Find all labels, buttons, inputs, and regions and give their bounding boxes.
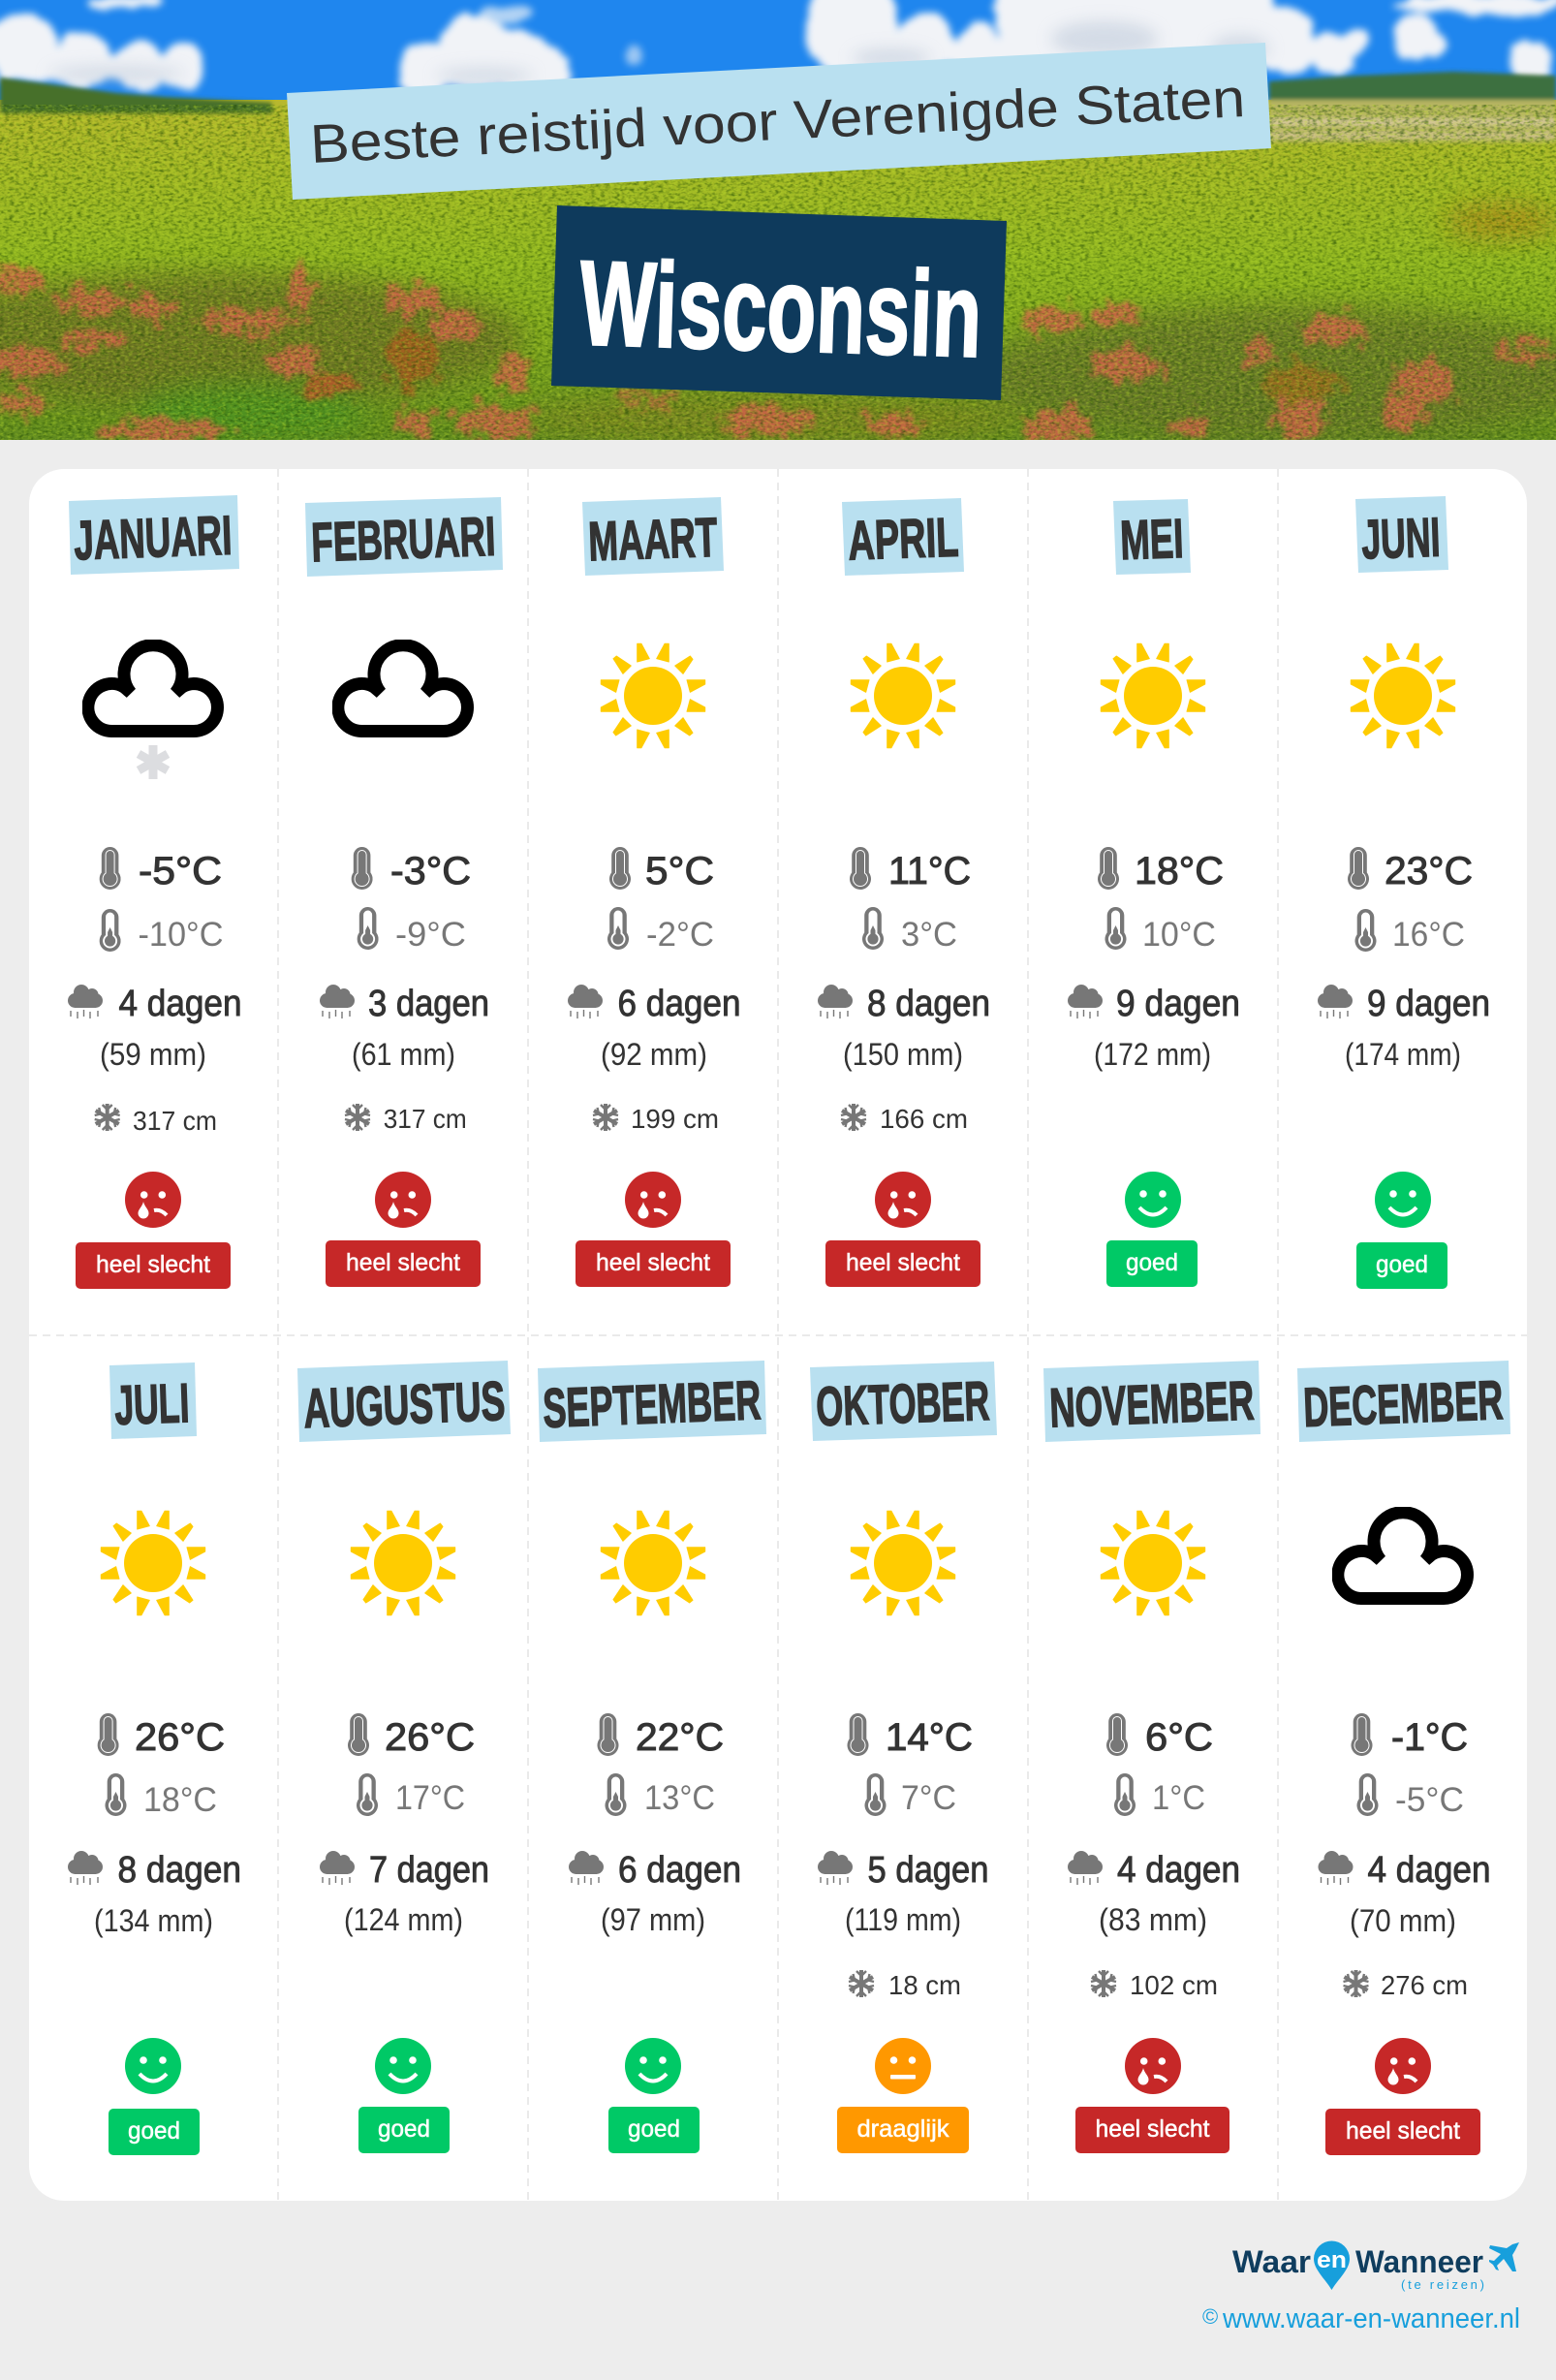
month label <box>582 497 724 576</box>
rating face <box>375 2038 431 2094</box>
high temperature <box>847 1713 973 1759</box>
rating badge: goed <box>1376 1251 1428 1278</box>
rain days: 3 dagen <box>368 984 489 1024</box>
month label <box>109 1362 197 1439</box>
month label <box>1043 1361 1260 1442</box>
month: maart <box>568 497 740 1287</box>
precipitation: (124 mm) <box>344 1902 463 1937</box>
month label <box>305 497 503 577</box>
copyright url: www.waar-en-wanneer.nl <box>1222 2303 1520 2334</box>
rain days <box>320 984 489 1024</box>
rain days: 8 dagen <box>118 1850 241 1891</box>
rain days: 7 dagen <box>369 1850 489 1891</box>
snowfall <box>841 1104 968 1134</box>
rating badge: heel slecht <box>346 1249 460 1276</box>
low temperature <box>864 1773 956 1817</box>
low temperature: -9°C <box>395 916 466 954</box>
low temperature <box>358 907 466 954</box>
high temperature <box>609 847 714 892</box>
month label: JANUARI <box>73 505 233 572</box>
rating badge <box>825 1240 980 1287</box>
month label: NOVEMBER <box>1048 1369 1255 1440</box>
month label: OKTOBER <box>815 1370 990 1438</box>
low temperature <box>862 907 957 954</box>
low temperature <box>1356 1773 1464 1819</box>
rating badge <box>1075 2107 1229 2153</box>
high temperature <box>1348 847 1473 892</box>
high temperature: 18°C <box>1135 850 1224 892</box>
month label <box>538 1361 766 1442</box>
month label: AUGUSTUS <box>302 1370 506 1440</box>
rating face <box>625 1172 681 1228</box>
rating face <box>875 2038 931 2094</box>
rain days <box>320 1850 489 1891</box>
month label <box>1355 496 1448 573</box>
high temperature: -1°C <box>1391 1716 1468 1759</box>
rain days <box>818 1850 988 1891</box>
month label: SEPTEMBER <box>542 1369 762 1440</box>
month label <box>1113 499 1191 575</box>
rating face <box>1125 1172 1181 1228</box>
month label <box>810 1362 997 1441</box>
low temperature <box>605 1773 715 1817</box>
high temperature: 5°C <box>645 850 714 892</box>
snowfall <box>95 1104 217 1136</box>
month: juli <box>68 1362 241 2155</box>
low temperature: 3°C <box>901 916 957 954</box>
high temperature <box>1351 1713 1468 1759</box>
high temperature <box>1106 1713 1213 1759</box>
icon: sun <box>101 1511 205 1615</box>
rating badge: goed <box>628 2115 680 2143</box>
high temperature: 14°C <box>886 1716 973 1759</box>
logo: Waar en Wanneer: Waar <box>1232 2244 1311 2279</box>
high temperature: -3°C <box>390 850 471 892</box>
low temperature <box>100 909 223 954</box>
high temperature: 6°C <box>1145 1716 1213 1759</box>
rating badge <box>1356 1242 1447 1289</box>
rating face <box>125 1172 181 1228</box>
precipitation: (61 mm) <box>352 1037 455 1072</box>
precipitation: (174 mm) <box>1345 1037 1461 1072</box>
rating face <box>375 1172 431 1228</box>
month: januari <box>68 495 242 1289</box>
high temperature <box>98 1713 225 1759</box>
rating face <box>1125 2038 1181 2094</box>
rating face <box>625 2038 681 2094</box>
low temperature <box>105 1773 217 1819</box>
rating face <box>1375 1172 1431 1228</box>
rain days <box>1318 1850 1490 1891</box>
high temperature <box>352 847 471 892</box>
month: oktober <box>810 1362 997 2153</box>
rain days <box>1318 984 1490 1024</box>
low temperature <box>607 907 714 954</box>
month label: JULI <box>113 1372 190 1437</box>
title: Wisconsin: Wisconsin <box>577 236 983 383</box>
snowfall: 18 cm <box>888 1970 961 2000</box>
low temperature <box>357 1773 465 1817</box>
precipitation: (150 mm) <box>843 1037 963 1072</box>
rain days <box>68 984 242 1024</box>
month label <box>69 495 239 575</box>
icon: sun <box>1351 643 1455 748</box>
icon: sun <box>851 1511 955 1615</box>
panel: months card <box>29 469 1527 2201</box>
rain days: 8 dagen <box>867 984 990 1024</box>
rating badge <box>326 1240 481 1287</box>
high temperature <box>597 1713 724 1759</box>
icon: cloud with snow <box>88 645 217 779</box>
banner: Beste reistijd voor Verenigde Staten: Beste reistijd voor Verenigde Staten <box>309 67 1246 174</box>
icon: sun <box>1101 1511 1205 1615</box>
high temperature: 22°C <box>636 1716 724 1759</box>
month: september <box>538 1361 766 2153</box>
low temperature <box>1105 907 1216 954</box>
precipitation: (70 mm) <box>1350 1903 1456 1938</box>
low temperature: 1°C <box>1152 1779 1205 1817</box>
rating badge <box>837 2107 969 2153</box>
low temperature: 16°C <box>1392 916 1465 954</box>
rating badge: heel slecht <box>846 1249 960 1276</box>
rating badge <box>576 1240 731 1287</box>
rating badge <box>1106 1240 1198 1287</box>
snowfall: 166 cm <box>880 1104 968 1134</box>
logo: Waar en Wanneer: Wanneer <box>1355 2244 1483 2279</box>
logo: Waar en Wanneer: (te reizen) <box>1401 2277 1484 2292</box>
precipitation: (59 mm) <box>100 1037 206 1072</box>
rating badge: draaglijk <box>856 2115 949 2143</box>
precipitation: (97 mm) <box>601 1902 705 1937</box>
precipitation: (83 mm) <box>1099 1902 1207 1937</box>
rain days: 9 dagen <box>1367 984 1490 1024</box>
high temperature <box>850 847 971 892</box>
month label: FEBRUARI <box>310 506 496 574</box>
low temperature <box>1354 909 1465 954</box>
rating badge: goed <box>128 2117 180 2145</box>
low temperature: 17°C <box>395 1779 465 1817</box>
rain days <box>1068 1850 1240 1891</box>
precipitation: (172 mm) <box>1094 1037 1211 1072</box>
low temperature <box>1114 1773 1205 1817</box>
snowfall: 199 cm <box>631 1104 719 1134</box>
rating badge: heel slecht <box>96 1251 210 1278</box>
low temperature: -10°C <box>138 916 223 954</box>
month label <box>842 498 964 576</box>
high temperature: 26°C <box>135 1716 225 1759</box>
rain days: 4 dagen <box>1368 1850 1490 1891</box>
icon: sun <box>1101 643 1205 748</box>
precipitation: (92 mm) <box>601 1037 707 1072</box>
banner: Beste reistijd voor Verenigde Staten <box>287 43 1271 200</box>
high temperature: 26°C <box>385 1716 475 1759</box>
rain days <box>68 1850 241 1891</box>
icon: cloud <box>1338 1513 1467 1599</box>
low temperature: 18°C <box>143 1781 217 1819</box>
snowfall <box>593 1104 719 1134</box>
high temperature: -5°C <box>139 850 222 892</box>
precipitation: (119 mm) <box>845 1902 961 1937</box>
low temperature: 7°C <box>901 1779 956 1817</box>
rating badge <box>1325 2109 1480 2155</box>
icon: sun <box>601 643 705 748</box>
rating badge: goed <box>378 2115 430 2143</box>
month: april <box>818 498 990 1287</box>
rating badge <box>608 2107 700 2153</box>
rain days <box>569 1850 741 1891</box>
month: december <box>1297 1361 1510 2155</box>
high temperature <box>348 1713 475 1759</box>
month label: JUNI <box>1360 507 1441 571</box>
rating badge <box>109 2109 200 2155</box>
rating badge <box>76 1242 231 1289</box>
low temperature: -5°C <box>1395 1781 1464 1819</box>
rain days: 5 dagen <box>868 1850 988 1891</box>
rain days: 6 dagen <box>618 984 740 1024</box>
logo: Waar en Wanneer <box>1232 2240 1519 2292</box>
rain days: 9 dagen <box>1116 984 1240 1024</box>
precipitation: (134 mm) <box>94 1903 213 1938</box>
icon: sun <box>351 1511 455 1615</box>
snowfall: 102 cm <box>1130 1970 1218 2000</box>
snowfall <box>849 1970 961 2000</box>
month label <box>297 1361 511 1442</box>
month: mei <box>1068 499 1240 1287</box>
month: november <box>1043 1361 1260 2153</box>
month: augustus <box>297 1361 511 2153</box>
snowfall <box>345 1104 467 1134</box>
rating badge: heel slecht <box>1346 2117 1460 2145</box>
month label: MEI <box>1119 508 1184 572</box>
rain days: 4 dagen <box>1117 1850 1240 1891</box>
rating badge: heel slecht <box>596 1249 710 1276</box>
rating face <box>125 2038 181 2094</box>
logo: Waar en Wanneer: en <box>1317 2247 1347 2273</box>
high temperature <box>1098 847 1224 892</box>
high temperature: 11°C <box>888 850 971 892</box>
icon: sun <box>851 643 955 748</box>
rain days: 6 dagen <box>618 1850 741 1891</box>
copyright url: © <box>1202 2304 1218 2329</box>
month label: APRIL <box>847 507 959 572</box>
snowfall: 276 cm <box>1381 1970 1468 2000</box>
rain days <box>568 984 740 1024</box>
hero landscape photo <box>0 0 1556 446</box>
rating face <box>1375 2038 1431 2094</box>
low temperature: -2°C <box>646 916 714 954</box>
rating face <box>875 1172 931 1228</box>
rating badge: goed <box>1126 1249 1178 1276</box>
snowfall <box>1343 1970 1468 2000</box>
high temperature <box>100 847 222 892</box>
rain days <box>818 984 990 1024</box>
rain days: 4 dagen <box>118 984 242 1024</box>
rating badge <box>358 2107 450 2153</box>
snowfall: 317 cm <box>384 1104 467 1134</box>
high temperature: 23°C <box>1385 850 1473 892</box>
snowfall <box>1091 1970 1218 2000</box>
snowfall: 317 cm <box>133 1106 217 1136</box>
month label: MAART <box>587 507 719 573</box>
icon: sun <box>601 1511 705 1615</box>
month: juni <box>1318 496 1490 1289</box>
low temperature: 10°C <box>1142 916 1216 954</box>
month: februari <box>305 497 503 1287</box>
low temperature: 13°C <box>644 1779 715 1817</box>
icon: cloud <box>338 645 467 732</box>
rain days <box>1068 984 1240 1024</box>
rating badge: heel slecht <box>1095 2115 1210 2143</box>
title: Wisconsin <box>551 205 1007 400</box>
